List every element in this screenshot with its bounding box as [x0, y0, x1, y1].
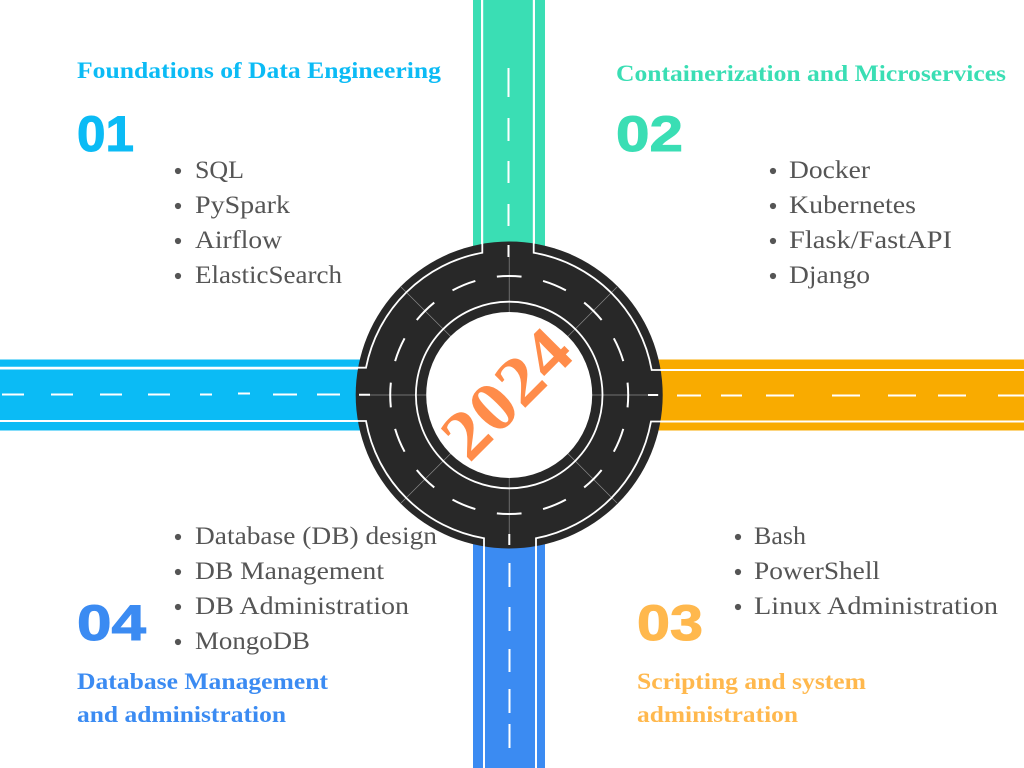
list 03: [735, 521, 998, 620]
list 02: Flask/FastAPI: [789, 225, 952, 254]
list 02: Docker: [789, 155, 871, 184]
list 01: [175, 155, 342, 289]
section 04: database: [77, 521, 437, 727]
road: bottom (blue): [473, 530, 545, 768]
list 04: DB Management: [195, 556, 384, 585]
list 04: [175, 521, 437, 655]
heading 02: Containerization and Microservices: [616, 61, 1006, 86]
list 03: PowerShell: [754, 556, 880, 585]
number 03: 03: [637, 595, 703, 651]
list 02: [770, 155, 952, 289]
heading 04: Database Management: [77, 669, 328, 694]
roundabout asphalt ring: [356, 242, 663, 548]
list 03: Bash: [754, 521, 806, 550]
section 03: scripting: [637, 521, 998, 727]
roundabout inner kerb: [416, 302, 602, 488]
list 01: PySpark: [195, 190, 290, 219]
heading 04: [77, 669, 328, 727]
heading 03: [637, 669, 866, 727]
list 02: Kubernetes: [789, 190, 916, 219]
roundabout entry dashes: [359, 245, 658, 545]
list 04: DB Administration: [195, 591, 409, 620]
section 01: foundations: [77, 58, 442, 289]
heading 01: Foundations of Data Engineering: [77, 58, 442, 83]
list 01: Airflow: [195, 225, 283, 254]
heading 03: Scripting and system: [637, 669, 866, 694]
list 03: Linux Administration: [754, 591, 998, 620]
number 04: 04: [77, 595, 146, 651]
roundabout spoke lines: [359, 245, 659, 545]
road: left (sky blue): [0, 360, 360, 430]
number 02: 02: [616, 106, 683, 162]
list 01: ElasticSearch: [195, 260, 342, 289]
heading 04: and administration: [77, 702, 286, 727]
section 02: containerization: [616, 61, 1006, 289]
heading 03: administration: [637, 702, 798, 727]
list 04: MongoDB: [195, 626, 310, 655]
number 01: 01: [77, 106, 134, 162]
list 01: SQL: [195, 155, 244, 184]
road: right (amber): [652, 360, 1024, 430]
centre island: [426, 312, 592, 478]
roundabout dashed centre line: [390, 276, 628, 514]
list 04: Database (DB) design: [195, 521, 437, 550]
list 02: Django: [789, 260, 870, 289]
year label 2024: 2024: [426, 313, 588, 475]
road: top (teal): [473, 0, 545, 250]
